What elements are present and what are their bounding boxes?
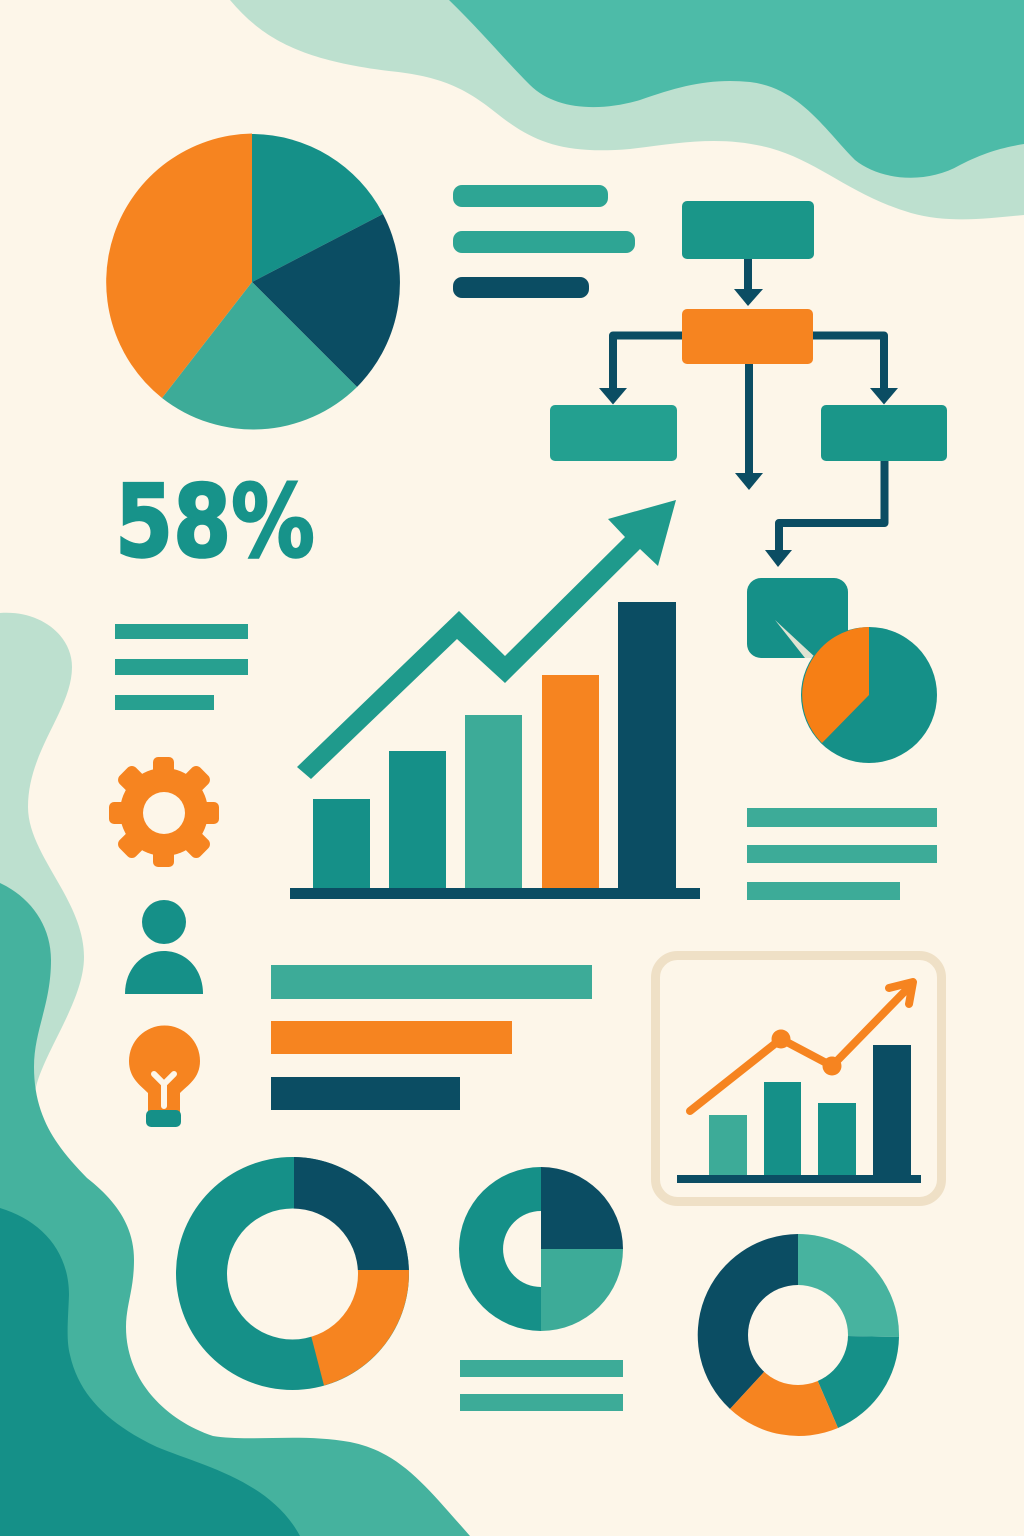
main bar chart with growth arrow <box>290 500 700 899</box>
bottom left wave background <box>0 613 470 1536</box>
text placeholder bars: left <box>115 624 248 710</box>
text placeholder bars: right <box>747 808 937 900</box>
big percentage figure: 58% <box>115 463 315 580</box>
flowchart <box>550 201 947 567</box>
icon: person <box>125 900 203 994</box>
pie chart: main <box>106 134 400 429</box>
donut chart: middle <box>459 1167 623 1331</box>
text placeholder bars: top <box>453 185 635 298</box>
icon: light bulb <box>129 1026 200 1127</box>
top right wave background <box>230 0 1024 219</box>
icon: gear <box>109 757 219 867</box>
donut chart: left <box>176 1157 409 1390</box>
framed mini bar and line chart <box>656 956 942 1202</box>
speech bubble with pie chart <box>747 578 937 763</box>
donut chart: right <box>698 1234 899 1436</box>
horizontal bar chart <box>271 965 592 1110</box>
text placeholder bars: bottom <box>460 1360 623 1411</box>
